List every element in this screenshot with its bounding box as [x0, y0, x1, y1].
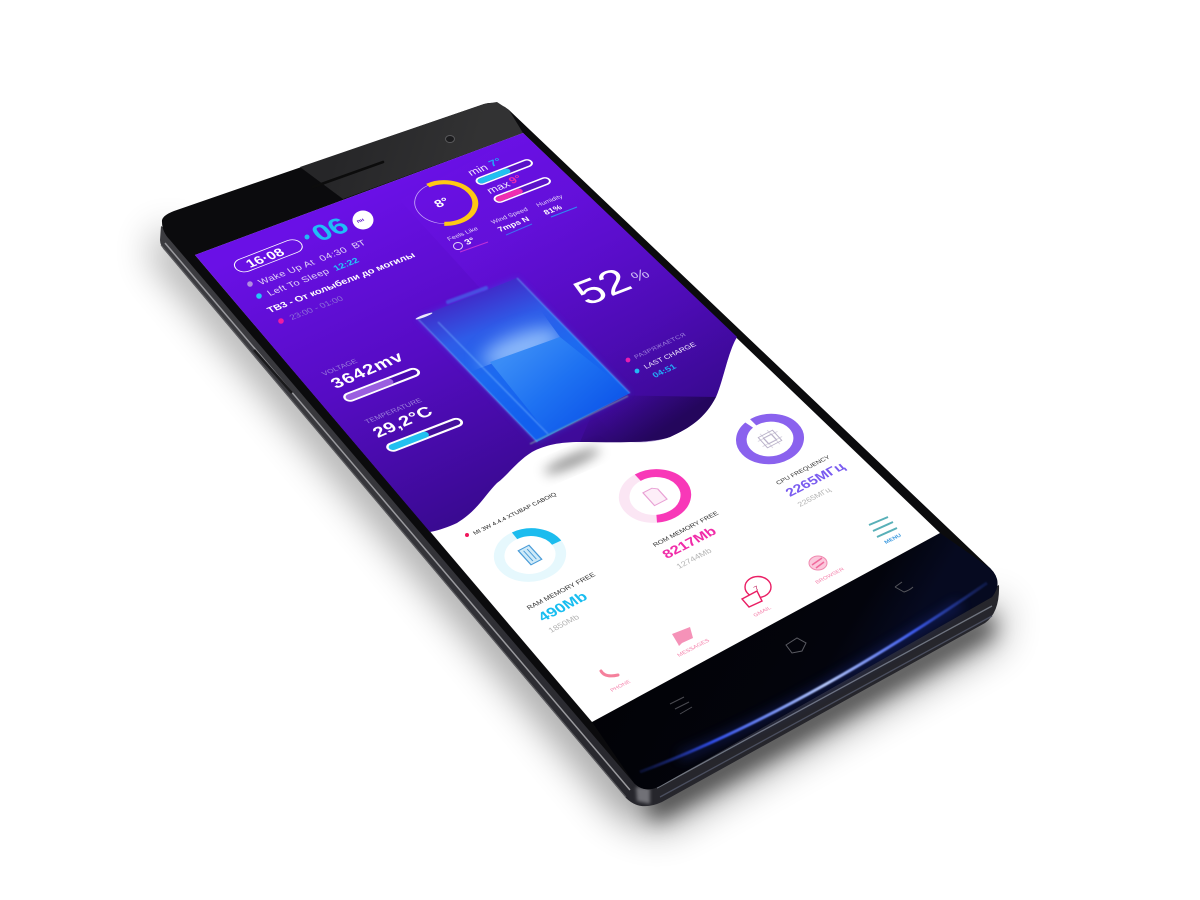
screen: [195, 133, 940, 722]
lower bezel tint: [592, 533, 998, 789]
voltage: VOLTAGE: [320, 357, 359, 377]
icon: gmail: [742, 576, 773, 618]
charge status: [626, 332, 698, 379]
right purple shade: [400, 133, 737, 442]
side frame: [160, 226, 999, 806]
day number: [304, 210, 374, 246]
temperature: 8°: [431, 195, 452, 210]
voltage bar: [343, 367, 421, 402]
charge percent: 52: [564, 261, 641, 313]
temperature value: 29,2°C: [369, 403, 437, 441]
wind speed: [490, 207, 532, 235]
time text: 16·08: [242, 245, 288, 270]
wind speed: Wind Speed: [490, 207, 530, 225]
browser label: BROWSER: [815, 567, 846, 585]
gmail label: GMAIL: [753, 606, 773, 618]
feels like: [446, 226, 488, 252]
feels like: Feels Like: [446, 226, 480, 242]
battery: [415, 278, 630, 444]
soft key: menu: [670, 697, 692, 714]
CPU ring: [729, 408, 811, 470]
voltage value: 3642mv: [327, 348, 408, 392]
phone label: PHONE: [610, 679, 632, 693]
wave dark shade: [580, 395, 716, 442]
RAM value: 490Mb: [535, 589, 591, 625]
icon: gmail: 7: [752, 584, 761, 592]
soft key: home: [786, 638, 806, 653]
icon: browser: [809, 556, 846, 585]
phone shadow: [150, 230, 1000, 830]
icon: phone: [601, 671, 632, 693]
earpiece area: [300, 102, 523, 199]
day badge: [352, 210, 374, 230]
wake up line: Wake Up At 04:30 ВТ: [256, 238, 369, 287]
ROM ring: [612, 464, 698, 528]
speaker: [313, 162, 383, 187]
icon: memory chip: [518, 545, 542, 565]
temperature: [363, 396, 464, 452]
max temperature: [485, 174, 552, 203]
day badge label: пн: [356, 218, 366, 224]
schedule list: [247, 238, 418, 324]
panel: purple battery area: [195, 133, 737, 532]
front glass: [162, 103, 998, 789]
battery outer glow: [417, 278, 630, 442]
battery glint: [415, 312, 433, 320]
last charge time: 04:51: [650, 362, 678, 379]
icon: cpu: [754, 427, 786, 451]
temperature: TEMPERATURE: [363, 396, 424, 425]
icon: menu: [869, 517, 903, 545]
ROM label: ROM MEMORY FREE: [652, 510, 721, 548]
CPU panel: [729, 408, 848, 508]
charge status: РАЗРЯЖАЕТСЯ: [633, 332, 688, 360]
corner highlight: [636, 787, 650, 804]
CPU value: 2265МГц: [782, 459, 848, 499]
min temperature: [466, 157, 534, 185]
last charge: LAST CHARGE: [642, 340, 698, 370]
ROM panel: [612, 464, 721, 570]
max temperature: max: [485, 179, 513, 196]
battery cap: [448, 288, 486, 302]
ROM value: 8217Mb: [660, 525, 720, 562]
tv programme: ТВ3 - От колыбели до могилы: [265, 251, 418, 315]
humidity: [535, 193, 577, 217]
ROM total: 12744Mb: [674, 546, 714, 570]
RAM total: 1850Mb: [546, 612, 581, 634]
left to sleep line: Left To Sleep: [265, 267, 332, 298]
weather ring: [401, 173, 489, 233]
min temperature: 7°: [487, 157, 504, 169]
feels like: 3°: [462, 236, 477, 246]
RAM label: RAM MEMORY FREE: [525, 571, 597, 611]
06: 06: [305, 212, 355, 246]
time pill: [231, 237, 306, 274]
max temperature: 9°: [507, 174, 524, 186]
min temperature: min: [466, 163, 491, 178]
glow arc: [640, 583, 987, 772]
battery body: [417, 278, 630, 442]
battery charge level: [490, 337, 630, 434]
menu label: MENU: [884, 533, 903, 545]
percent sign: %: [627, 266, 653, 285]
icon: sd card: [643, 486, 667, 506]
humidity: 81%: [541, 203, 565, 216]
device label: MI 3W 4.4.4 XTUBAP CABOIQ: [472, 491, 558, 536]
phone body: [160, 102, 999, 806]
CPU max: 2265МГц: [796, 486, 833, 508]
RAM ring: [485, 521, 575, 589]
wave shadow: [542, 445, 602, 477]
RAM panel: [485, 521, 597, 634]
sleep time: 12:22: [331, 256, 361, 272]
tv time: 23:00 - 01:00: [287, 294, 345, 321]
camera: [446, 136, 454, 142]
voltage: [320, 348, 421, 402]
side button: [254, 350, 292, 393]
wind speed: 7mps N: [495, 215, 531, 233]
battery light glow: [474, 316, 560, 369]
messages label: MESSAGES: [677, 638, 711, 658]
CPU label: CPU FREQUENCY: [775, 454, 832, 486]
soft key: back: [895, 582, 913, 592]
humidity: Humidity: [535, 193, 565, 208]
temperature bar: [386, 417, 464, 452]
icon: messages: [672, 627, 711, 658]
